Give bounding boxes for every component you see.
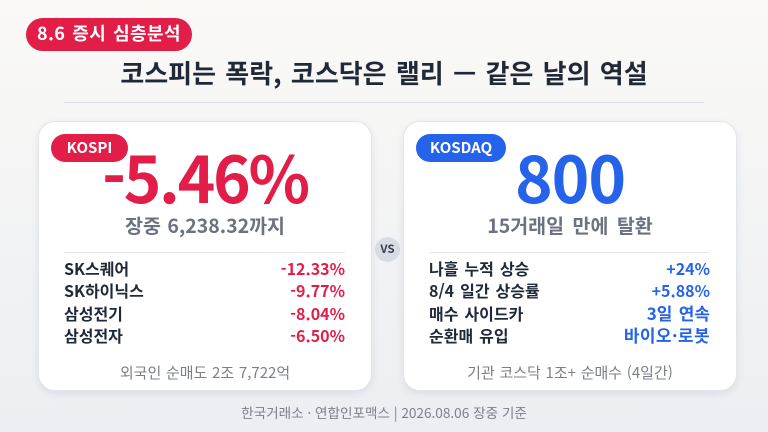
KOSPI footnote: 외국인 순매도 2조 7,722억 xyxy=(120,362,290,383)
KOSPI stock list: SK하이닉스 xyxy=(64,278,144,302)
KOSDAQ badge: KOSDAQ xyxy=(430,137,492,158)
KOSDAQ stats list: 8/4 일간 상승률 xyxy=(429,278,540,302)
VS badge: VS xyxy=(380,241,395,257)
KOSDAQ footnote: 기관 코스닥 1조+ 순매수 (4일간) xyxy=(467,362,673,383)
KOSPI stock list: -9.77% xyxy=(290,278,345,302)
KOSDAQ stats list: 나흘 누적 상승 xyxy=(429,256,529,280)
KOSPI badge: KOSPI xyxy=(67,137,112,158)
KOSPI stock list: -6.50% xyxy=(290,323,345,347)
KOSDAQ stats list xyxy=(429,256,710,347)
KOSDAQ stats list: 순환매 유입 xyxy=(429,323,509,347)
KOSPI stock list xyxy=(64,256,345,347)
KOSDAQ headline number: 800 xyxy=(515,130,625,222)
source line: 한국거래소 · 연합인포맥스 | 2026.08.06 장중 기준 xyxy=(241,402,527,422)
VS badge xyxy=(375,237,400,262)
KOSDAQ stats list: +24% xyxy=(666,256,710,280)
KOSPI stock list: 삼성전자 xyxy=(64,323,123,347)
KOSPI subtitle: 장중 6,238.32까지 xyxy=(125,210,285,239)
KOSDAQ stats list: 매수 사이드카 xyxy=(429,301,523,325)
KOSDAQ badge xyxy=(416,134,506,162)
KOSPI headline number: -5.46% xyxy=(102,130,308,222)
panel: KOSPI xyxy=(39,122,371,390)
KOSDAQ stats list: 3일 연속 xyxy=(647,300,710,325)
KOSPI stock list: -12.33% xyxy=(281,256,345,280)
title: 코스피는 폭락, 코스닥은 랠리 — 같은 날의 역설 xyxy=(120,54,648,91)
KOSDAQ stats list: +5.88% xyxy=(652,278,710,302)
KOSDAQ subtitle: 15거래일 만에 탈환 xyxy=(487,210,653,239)
KOSDAQ stats list: 바이오·로봇 xyxy=(624,322,710,347)
KOSPI stock list: 삼성전기 xyxy=(64,301,123,325)
KOSPI stock list: -8.04% xyxy=(290,301,345,325)
KOSPI stock list: SK스퀘어 xyxy=(64,256,129,280)
tag: 8.6 market deep analysis xyxy=(26,18,192,51)
tag: 8.6 market deep analysis: 8.6 증시 심층분석 xyxy=(37,20,181,46)
KOSPI badge xyxy=(51,134,128,162)
panel: KOSDAQ xyxy=(404,122,736,390)
